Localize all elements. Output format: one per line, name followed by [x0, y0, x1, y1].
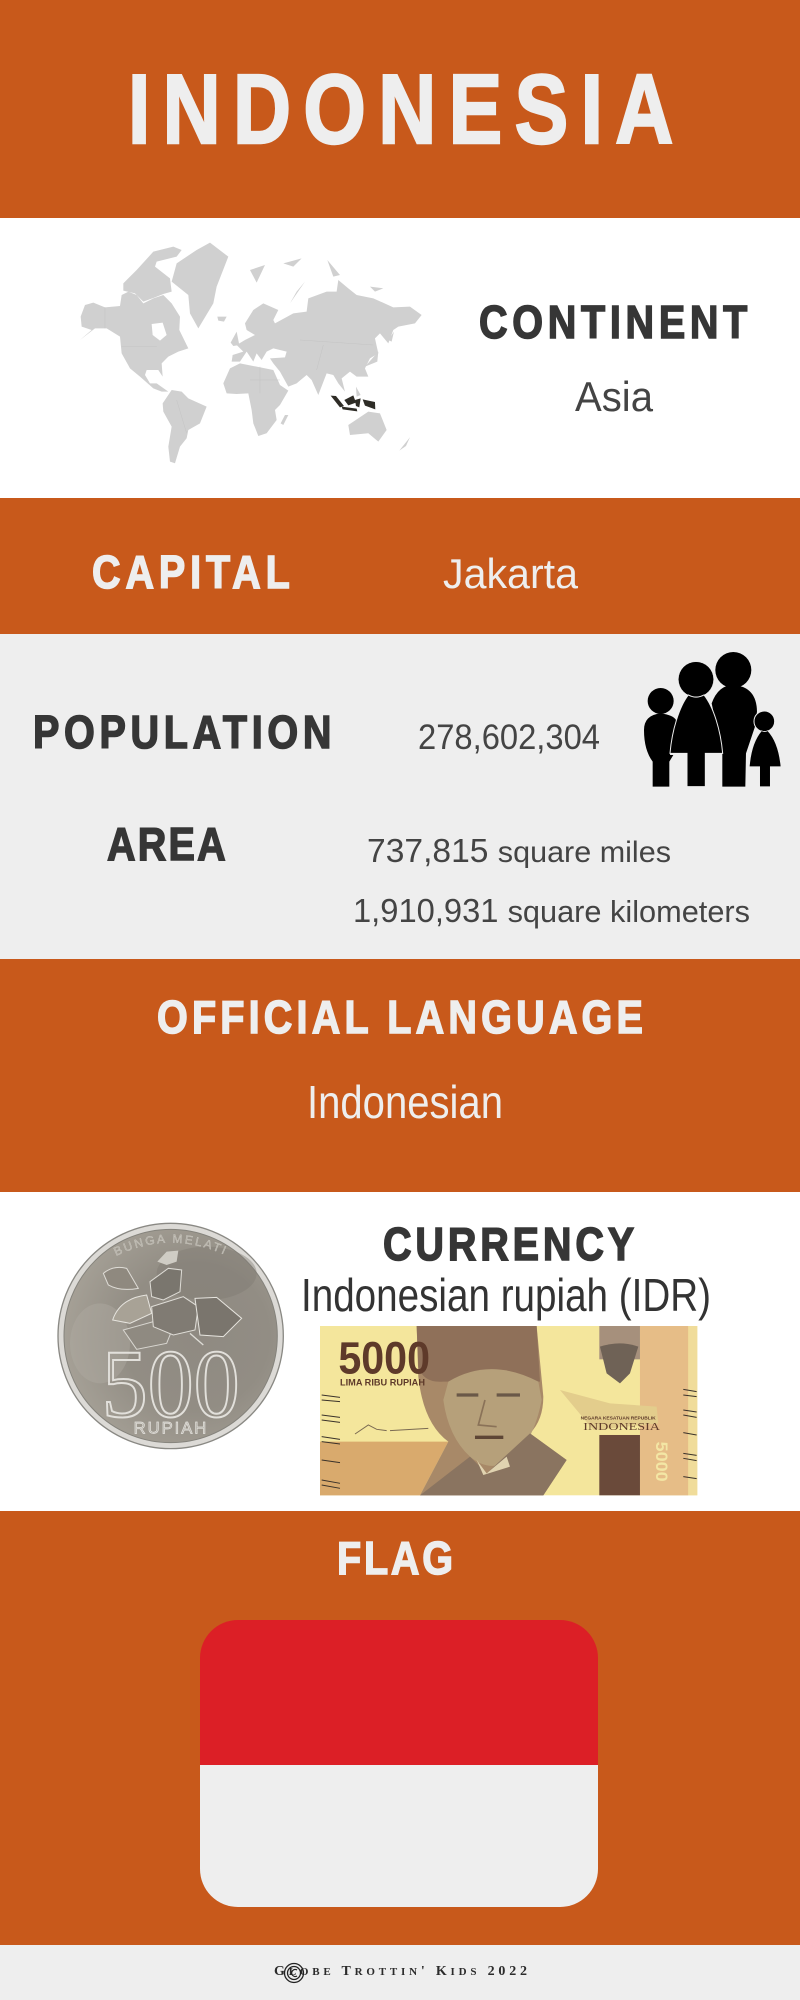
- world map: [80, 243, 422, 463]
- capital value: Jakarta: [443, 550, 579, 597]
- panel: title banner: [0, 0, 800, 218]
- coin label: RUPIAH: [134, 1418, 206, 1437]
- panel: continent: [0, 218, 800, 498]
- panel: currency: [57, 1219, 711, 1496]
- currency heading: CURRENCY: [383, 1219, 634, 1271]
- footer credit: G LOBE T ROTTIN ' K IDS 2022: [274, 1964, 527, 1979]
- panel: official language: [0, 959, 800, 1192]
- banknote value in words: LIMA RIBU RUPIAH: [340, 1377, 425, 1387]
- icon: family: [644, 652, 781, 787]
- banknote: [320, 1326, 697, 1495]
- title: INDONESIA: [128, 54, 673, 164]
- banknote value: 5000: [338, 1332, 430, 1383]
- area heading: AREA: [107, 819, 226, 871]
- banknote country: INDONESIA: [583, 1422, 660, 1433]
- population value: 278,602,304: [418, 718, 600, 757]
- panel: capital: [0, 498, 800, 634]
- copyright symbol: [284, 1964, 304, 1982]
- banknote side value: 5000: [652, 1442, 671, 1482]
- icon: 500 rupiah coin: [57, 1222, 284, 1450]
- panel: population and area: [0, 634, 800, 959]
- area in square kilometers: 1,910,931 square kilometers: [353, 892, 750, 929]
- panel: footer: [0, 1945, 800, 2000]
- banknote republic line: NEGARA KESATUAN REPUBLIK: [581, 1415, 656, 1421]
- panel: flag: [0, 1511, 800, 1945]
- area in square miles: 737,815 square miles: [367, 832, 671, 869]
- Indonesia highlighted: [331, 395, 375, 411]
- continent value: Asia: [575, 373, 654, 420]
- coin denomination: 500: [102, 1329, 240, 1438]
- language value: Indonesian: [307, 1076, 503, 1128]
- population heading: POPULATION: [33, 707, 331, 759]
- language heading: OFFICIAL LANGUAGE: [157, 992, 643, 1044]
- coin inscription: BUNGA MELATI: [114, 1234, 226, 1256]
- continent heading: CONTINENT: [479, 297, 747, 349]
- flag heading: FLAG: [337, 1533, 453, 1585]
- currency value: Indonesian rupiah (IDR): [301, 1269, 711, 1321]
- capital heading: CAPITAL: [92, 547, 290, 599]
- flag of Indonesia: [200, 1620, 598, 1907]
- banknote signatures: [355, 1425, 428, 1434]
